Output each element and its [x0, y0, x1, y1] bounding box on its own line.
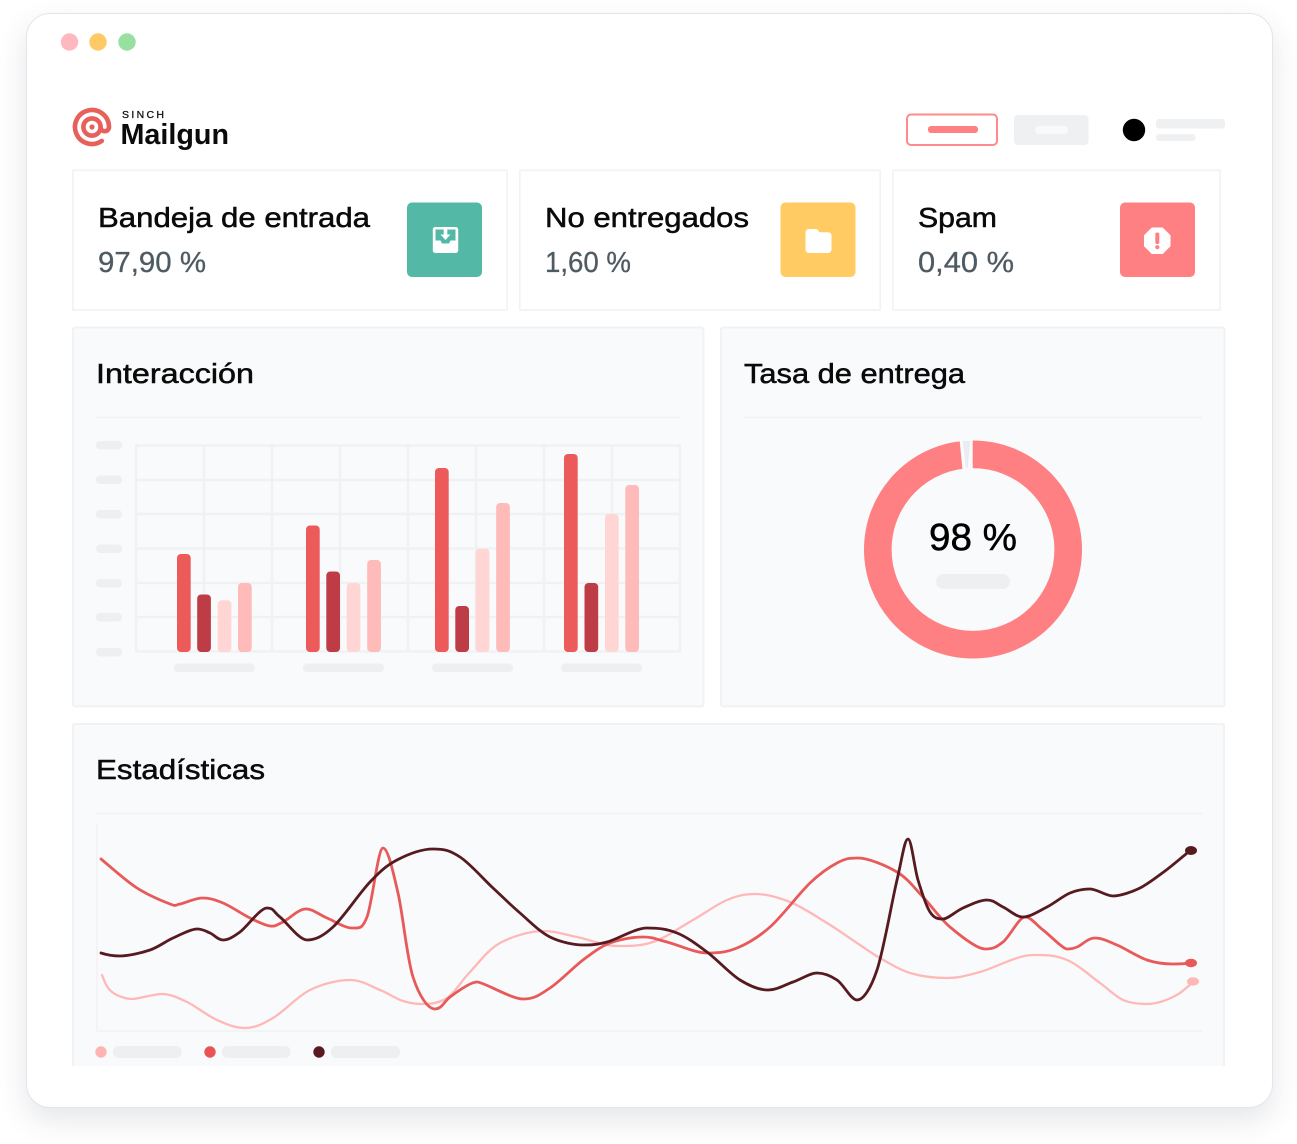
logo wordmark: Mailgun	[120, 119, 229, 151]
bar chart	[96, 441, 680, 672]
heading: No entregados	[545, 202, 749, 233]
heading: Interacción	[96, 358, 254, 389]
header controls	[907, 114, 1225, 145]
panel: Interacción	[73, 328, 704, 706]
logo small text: SINCH	[122, 109, 164, 121]
window control dots	[61, 33, 136, 51]
icon: at sign	[75, 110, 109, 144]
heading: Bandeja de entrada	[98, 202, 371, 233]
panel: Spam	[893, 170, 1220, 310]
logo: Sinch Mailgun	[75, 109, 229, 151]
line chart	[97, 825, 1202, 1031]
value: 0,40 %	[918, 247, 1014, 279]
value: 1,60 %	[545, 247, 631, 279]
panel: Bandeja de entrada	[73, 170, 507, 310]
donut chart	[878, 439, 1068, 645]
value: 97,90 %	[98, 247, 206, 279]
icon: inbox	[407, 202, 482, 277]
heading: Spam	[918, 202, 997, 233]
heading: Tasa de entrega	[744, 358, 966, 389]
icon: alert	[1120, 202, 1195, 277]
heading: Estadísticas	[96, 754, 265, 785]
panel: No entregados	[520, 170, 880, 310]
panel: Estadísticas	[73, 724, 1224, 1066]
icon: folder	[780, 202, 856, 277]
panel: Tasa de entrega	[721, 328, 1224, 706]
legend	[95, 1046, 400, 1058]
donut value: 98 %	[929, 517, 1017, 559]
